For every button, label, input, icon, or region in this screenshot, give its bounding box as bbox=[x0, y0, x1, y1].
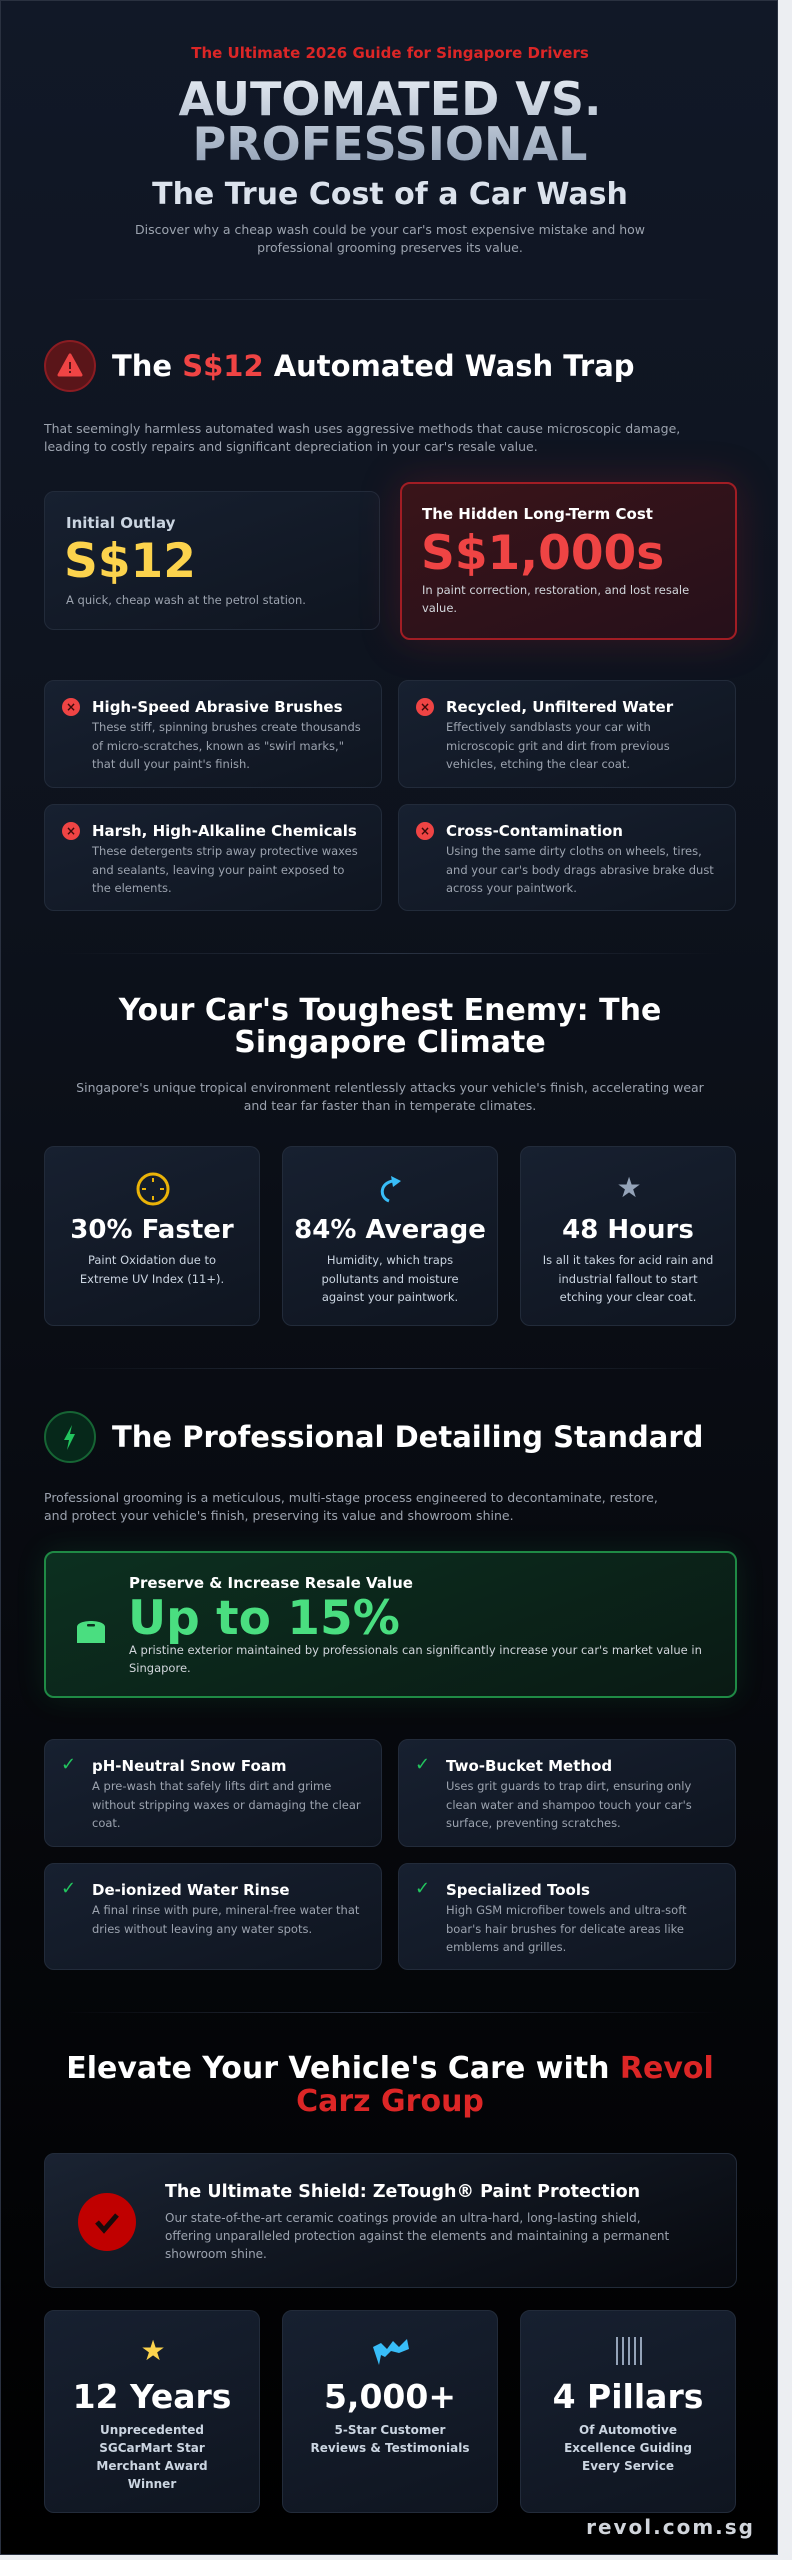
stat: humidity: 84% Average bbox=[294, 1215, 486, 1245]
resale value callout: A pristine exterior maintained by professionals can significantly increase your car's market value in Singapore. bbox=[129, 1643, 702, 1675]
intro text: Discover why a cheap wash could be your car's most expensive mistake and how bbox=[135, 222, 645, 237]
problem: chemicals bbox=[44, 804, 382, 911]
stat: reviews: 5,000+ bbox=[324, 2377, 456, 2416]
section 1 header bbox=[44, 340, 635, 392]
step: tools: Specialized Tools bbox=[446, 1881, 590, 1899]
title: PROFESSIONAL bbox=[193, 117, 587, 171]
section 3 text: and protect your vehicle's finish, preserving its value and showroom shine. bbox=[44, 1508, 514, 1523]
climate text: and tear far faster than in temperate climates. bbox=[244, 1098, 536, 1113]
section 1 paragraph bbox=[44, 421, 680, 454]
icon: gold star: ★ bbox=[140, 2334, 166, 2367]
stat: 48 hours bbox=[520, 1146, 736, 1326]
card: hidden cost bbox=[400, 482, 737, 640]
stat: 12 years: Unprecedented SGCarMart Star Merchant Award Winner bbox=[96, 2423, 208, 2491]
problem: water: Recycled, Unfiltered Water bbox=[446, 698, 673, 716]
stat: 48 hours: 48 Hours bbox=[562, 1215, 694, 1245]
card: hidden cost: The Hidden Long-Term Cost bbox=[422, 505, 653, 523]
icon: check badge bbox=[78, 2193, 136, 2251]
problem: brushes bbox=[44, 680, 382, 788]
stat: UV: 30% Faster bbox=[70, 1215, 234, 1245]
stat: 48 hours: Is all it takes for acid rain and industrial fallout to start etching your clear coat. bbox=[543, 1253, 713, 1304]
step: de-ionized: ✓ bbox=[61, 1878, 76, 1899]
card: initial outlay bbox=[44, 491, 380, 630]
problem: water: Effectively sandblasts your car with microscopic grit and dirt from previous vehicles, etching the clear coat. bbox=[446, 720, 670, 771]
stat: reviews: 5-Star Customer bbox=[335, 2423, 445, 2437]
step: snow foam: A pre-wash that safely lifts dirt and grime without stripping waxes or damaging the clear coat. bbox=[92, 1779, 361, 1830]
eyebrow: The Ultimate 2026 Guide for Singapore Drivers bbox=[191, 44, 589, 62]
icon: warning bbox=[44, 340, 96, 392]
problem: brushes: These stiff, spinning brushes create thousands of micro-scratches, known as "swirl marks," that dull your paint's finish. bbox=[92, 720, 361, 771]
climate text bbox=[76, 1080, 704, 1113]
card: initial outlay: Initial Outlay bbox=[66, 514, 175, 532]
heading: The S$12 Automated Wash Trap bbox=[112, 349, 635, 383]
problem: contamination: × bbox=[420, 824, 430, 838]
climate heading: Your Car's Toughest Enemy: The bbox=[119, 993, 661, 1028]
stat: pillars bbox=[520, 2310, 736, 2513]
climate heading: Singapore Climate bbox=[234, 1025, 546, 1060]
card: initial outlay: A quick, cheap wash at the petrol station. bbox=[66, 593, 306, 607]
icon: pillars bbox=[616, 2337, 642, 2365]
problem: contamination: Cross-Contamination bbox=[446, 822, 623, 840]
problem: water bbox=[398, 680, 736, 788]
step: two-bucket: Uses grit guards to trap dirt, ensuring only clean water and shampoo touch your car's surface, preventing scratches. bbox=[446, 1779, 692, 1830]
stat: humidity: Humidity, which traps pollutants and moisture against your paintwork. bbox=[321, 1253, 459, 1304]
heading: The Professional Detailing Standard bbox=[112, 1420, 703, 1454]
step: two-bucket: ✓ bbox=[415, 1754, 430, 1775]
icon: sun bbox=[136, 1172, 170, 1206]
stat: humidity bbox=[282, 1146, 498, 1326]
step: snow foam bbox=[44, 1739, 382, 1847]
resale value callout: Up to 15% bbox=[128, 1591, 400, 1646]
card: hidden cost: S$1,000s bbox=[421, 526, 664, 581]
ZeTough card: offering unparalleled protection against the elements and maintaining a permanent showroom shine. bbox=[165, 2229, 669, 2261]
ZeTough card: The Ultimate Shield: ZeTough® Paint Protection bbox=[165, 2182, 640, 2202]
icon: lightning bbox=[44, 1411, 96, 1463]
resale value callout bbox=[44, 1551, 737, 1698]
problem: water: × bbox=[420, 700, 430, 714]
intro text bbox=[135, 222, 645, 255]
card: initial outlay: S$12 bbox=[64, 534, 196, 589]
step: tools bbox=[398, 1863, 736, 1970]
step: de-ionized: De-ionized Water Rinse bbox=[92, 1881, 290, 1899]
section 3 text: Professional grooming is a meticulous, multi-stage process engineered to decontaminate, restore, bbox=[44, 1490, 658, 1505]
step: two-bucket: Two-Bucket Method bbox=[446, 1757, 612, 1775]
step: tools: ✓ bbox=[415, 1878, 430, 1899]
problem: chemicals: × bbox=[66, 824, 76, 838]
section 1 paragraph: That seemingly harmless automated wash uses aggressive methods that cause microscopic damage, bbox=[44, 421, 680, 436]
step: two-bucket bbox=[398, 1739, 736, 1847]
card: hidden cost: In paint correction, restoration, and lost resale value. bbox=[422, 583, 689, 615]
problem: contamination: Using the same dirty cloths on wheels, tires, and your car's body drags abrasive brake dust across your paintwork. bbox=[446, 844, 714, 895]
icon: handshake bbox=[373, 2339, 409, 2365]
ZeTough card: Our state-of-the-art ceramic coatings provide an ultra-hard, long-lasting shield, bbox=[165, 2211, 641, 2225]
stat: reviews: Reviews & Testimonials bbox=[310, 2441, 469, 2455]
climate heading bbox=[118, 993, 661, 1060]
icon: lock bbox=[77, 1621, 105, 1643]
step: snow foam: ✓ bbox=[61, 1754, 76, 1775]
step: snow foam: pH-Neutral Snow Foam bbox=[92, 1757, 287, 1775]
problem: contamination bbox=[398, 804, 736, 911]
CTA heading: Carz Group bbox=[296, 2084, 484, 2119]
section 3 text bbox=[44, 1490, 658, 1523]
step: de-ionized: A final rinse with pure, mineral-free water that dries without leaving any water spots. bbox=[92, 1903, 359, 1936]
step: tools: High GSM microfiber towels and ultra-soft boar's hair brushes for delicate areas like emblems and grilles. bbox=[446, 1903, 687, 1954]
problem: chemicals: Harsh, High-Alkaline Chemicals bbox=[92, 822, 357, 840]
title bbox=[1, 77, 779, 167]
ZeTough card bbox=[44, 2153, 737, 2288]
step: de-ionized bbox=[44, 1863, 382, 1970]
stat: pillars: 4 Pillars bbox=[553, 2377, 703, 2416]
subtitle: The True Cost of a Car Wash bbox=[152, 177, 628, 212]
problem: brushes: High-Speed Abrasive Brushes bbox=[92, 698, 343, 716]
resale value callout: Preserve & Increase Resale Value bbox=[129, 1574, 413, 1592]
intro text: professional grooming preserves its value. bbox=[257, 240, 523, 255]
problem: brushes: × bbox=[66, 700, 76, 714]
CTA heading: Elevate Your Vehicle's Care with Revol bbox=[66, 2051, 714, 2086]
section 1 paragraph: leading to costly repairs and significant depreciation in your car's resale value. bbox=[44, 439, 538, 454]
stat: reviews bbox=[282, 2310, 498, 2513]
stat: UV bbox=[44, 1146, 260, 1326]
icon: star: ★ bbox=[616, 1171, 642, 1204]
stat: UV: Paint Oxidation due to Extreme UV Index (11+). bbox=[80, 1253, 224, 1286]
stat: 12 years: 12 Years bbox=[73, 2377, 231, 2416]
section 3 header bbox=[44, 1411, 703, 1463]
problem: chemicals: These detergents strip away protective waxes and sealants, leaving your paint exposed to the elements. bbox=[92, 844, 358, 895]
title: AUTOMATED VS. bbox=[178, 72, 602, 126]
footer url: revol.com.sg bbox=[586, 2515, 755, 2539]
CTA heading bbox=[66, 2051, 714, 2119]
stat: pillars: Of Automotive Excellence Guiding Every Service bbox=[564, 2423, 692, 2473]
icon: arrow bbox=[380, 1176, 401, 1202]
stat: 12 years bbox=[44, 2310, 260, 2513]
climate text: Singapore's unique tropical environment relentlessly attacks your vehicle's finish, accelerating wear bbox=[76, 1080, 704, 1095]
